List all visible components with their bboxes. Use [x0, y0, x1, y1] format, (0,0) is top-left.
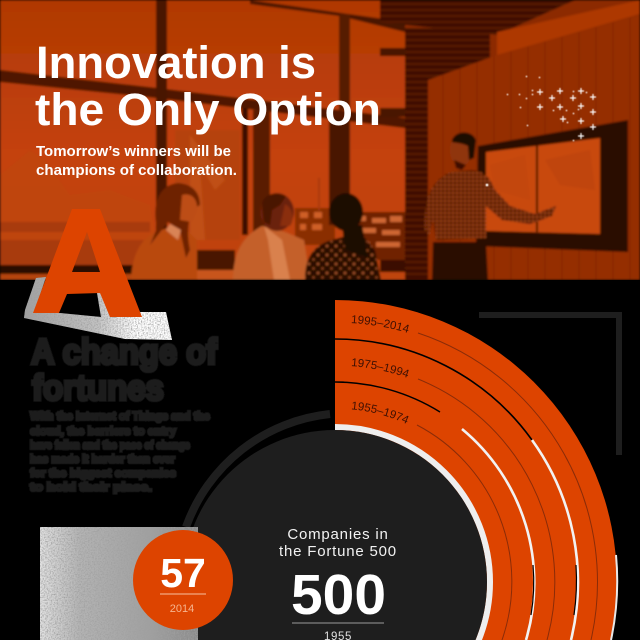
hero photo: meeting room in orange duotone [0, 0, 640, 280]
section heading (low contrast): fortunes [32, 367, 164, 408]
section letter A with broken white shadow [24, 209, 172, 340]
orange circle: 57 in 2014: 2014 [170, 603, 194, 615]
section body text (low contrast): for the biggest companies [30, 466, 176, 480]
section body text (low contrast): cloud, the barriers to entry [30, 424, 176, 438]
section heading (low contrast) [31, 331, 218, 408]
top-right corner bracket [479, 315, 619, 455]
band labels: 1995–2014 [352, 315, 409, 333]
title: the Only Option [35, 84, 381, 135]
subtitle: champions of collaboration. [36, 163, 237, 179]
band labels: 1975–1994 [352, 358, 409, 378]
band labels [352, 315, 409, 424]
section heading (low contrast): A change of [31, 331, 218, 372]
band labels: 1955–1974 [352, 402, 408, 424]
dark centre circle with 1955 count [183, 430, 487, 640]
title: Innovation is [36, 37, 316, 88]
centre heading: Companies in [287, 526, 389, 543]
orange circle: 57 in 2014: 57 [160, 550, 206, 596]
ring chart: three orange era bands [335, 300, 618, 640]
thin inner arcs [417, 333, 597, 640]
subtitle: Tomorrow’s winners will be [36, 144, 231, 160]
title [35, 37, 381, 135]
section body text (low contrast): to hold their place. [30, 480, 152, 494]
centre heading [279, 526, 397, 560]
section body text (low contrast): With the Internet of Things and the [30, 409, 210, 423]
section body text (low contrast) [30, 409, 210, 494]
big number 500: 500 [291, 563, 386, 627]
grey noise panel [40, 527, 198, 640]
photo sparkles over the wall [486, 76, 596, 186]
section body text (low contrast): has made it harder than ever [30, 452, 175, 466]
band dividers [335, 339, 617, 640]
thin dark arc around circle [186, 414, 330, 527]
orange circle: 57 in 2014 [133, 530, 233, 630]
centre heading: the Fortune 500 [279, 543, 397, 560]
subtitle [36, 144, 237, 179]
section body text (low contrast): have fallen and the pace of change [30, 438, 190, 452]
